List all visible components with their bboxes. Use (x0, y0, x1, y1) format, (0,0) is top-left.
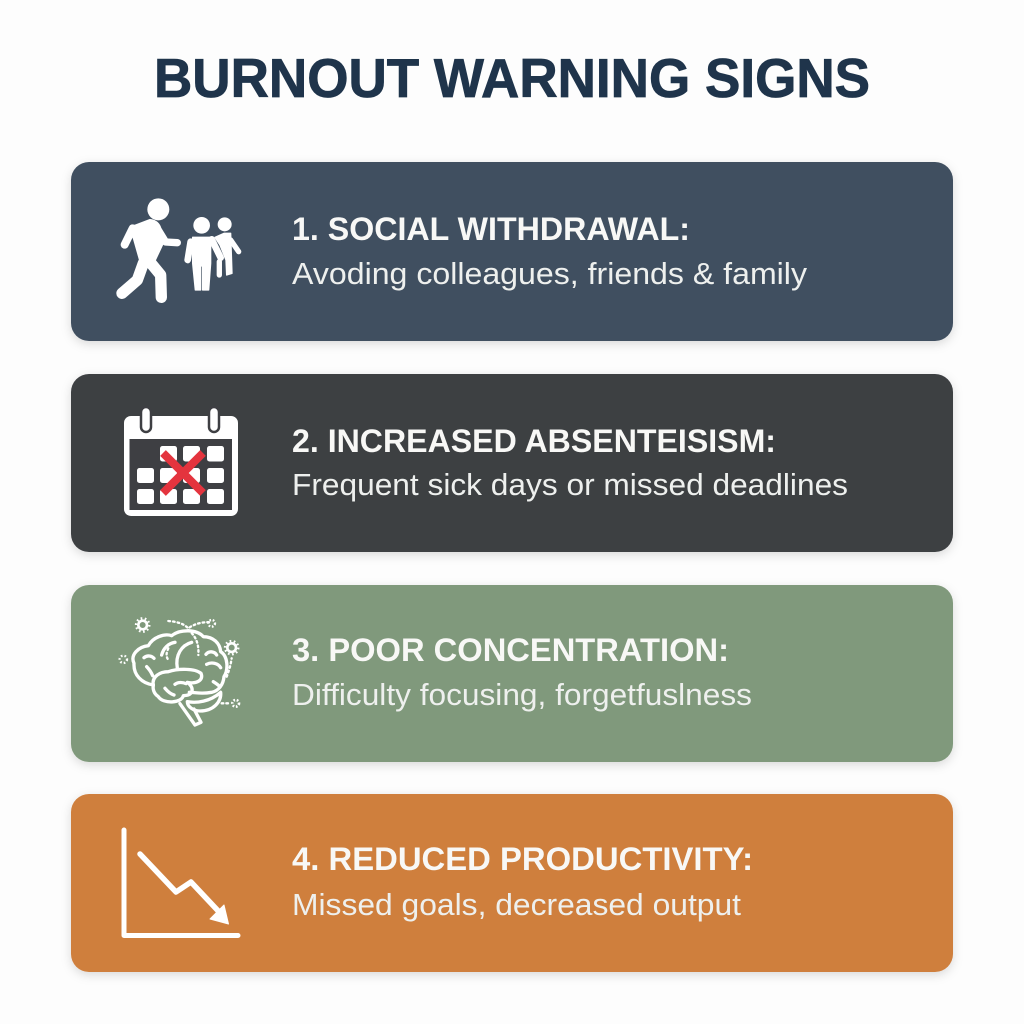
icon: calendar with red cross (124, 407, 238, 516)
description: social withdrawal: Avoding colleagues, friends & family (292, 256, 808, 291)
panel: reduced productivity (71, 794, 953, 972)
panel: poor concentration (71, 585, 953, 762)
panel: increased absenteeism (71, 374, 953, 552)
icon detail: gears (120, 618, 239, 707)
description: increased absenteeism: Frequent sick days or missed deadlines (292, 467, 848, 502)
heading: reduced productivity: 4. REDUCED PRODUCTIVITY: (292, 841, 753, 877)
icon: declining line chart (124, 830, 238, 936)
heading: social withdrawal: 1. SOCIAL WITHDRAWAL: (292, 211, 690, 247)
icon: brain with scattered thoughts (120, 618, 239, 725)
description: poor concentration: Difficulty focusing, forgetfuslness (292, 677, 752, 712)
title: BURNOUT WARNING SIGNS (154, 47, 870, 109)
description: reduced productivity: Missed goals, decreased output (292, 887, 741, 922)
heading: poor concentration: 3. POOR CONCENTRATION: (292, 632, 729, 668)
icon: person walking away from two people (100, 180, 239, 297)
panel: social withdrawal (71, 162, 953, 341)
heading: increased absenteeism: 2. INCREASED ABSENTEISISM: (292, 423, 776, 459)
